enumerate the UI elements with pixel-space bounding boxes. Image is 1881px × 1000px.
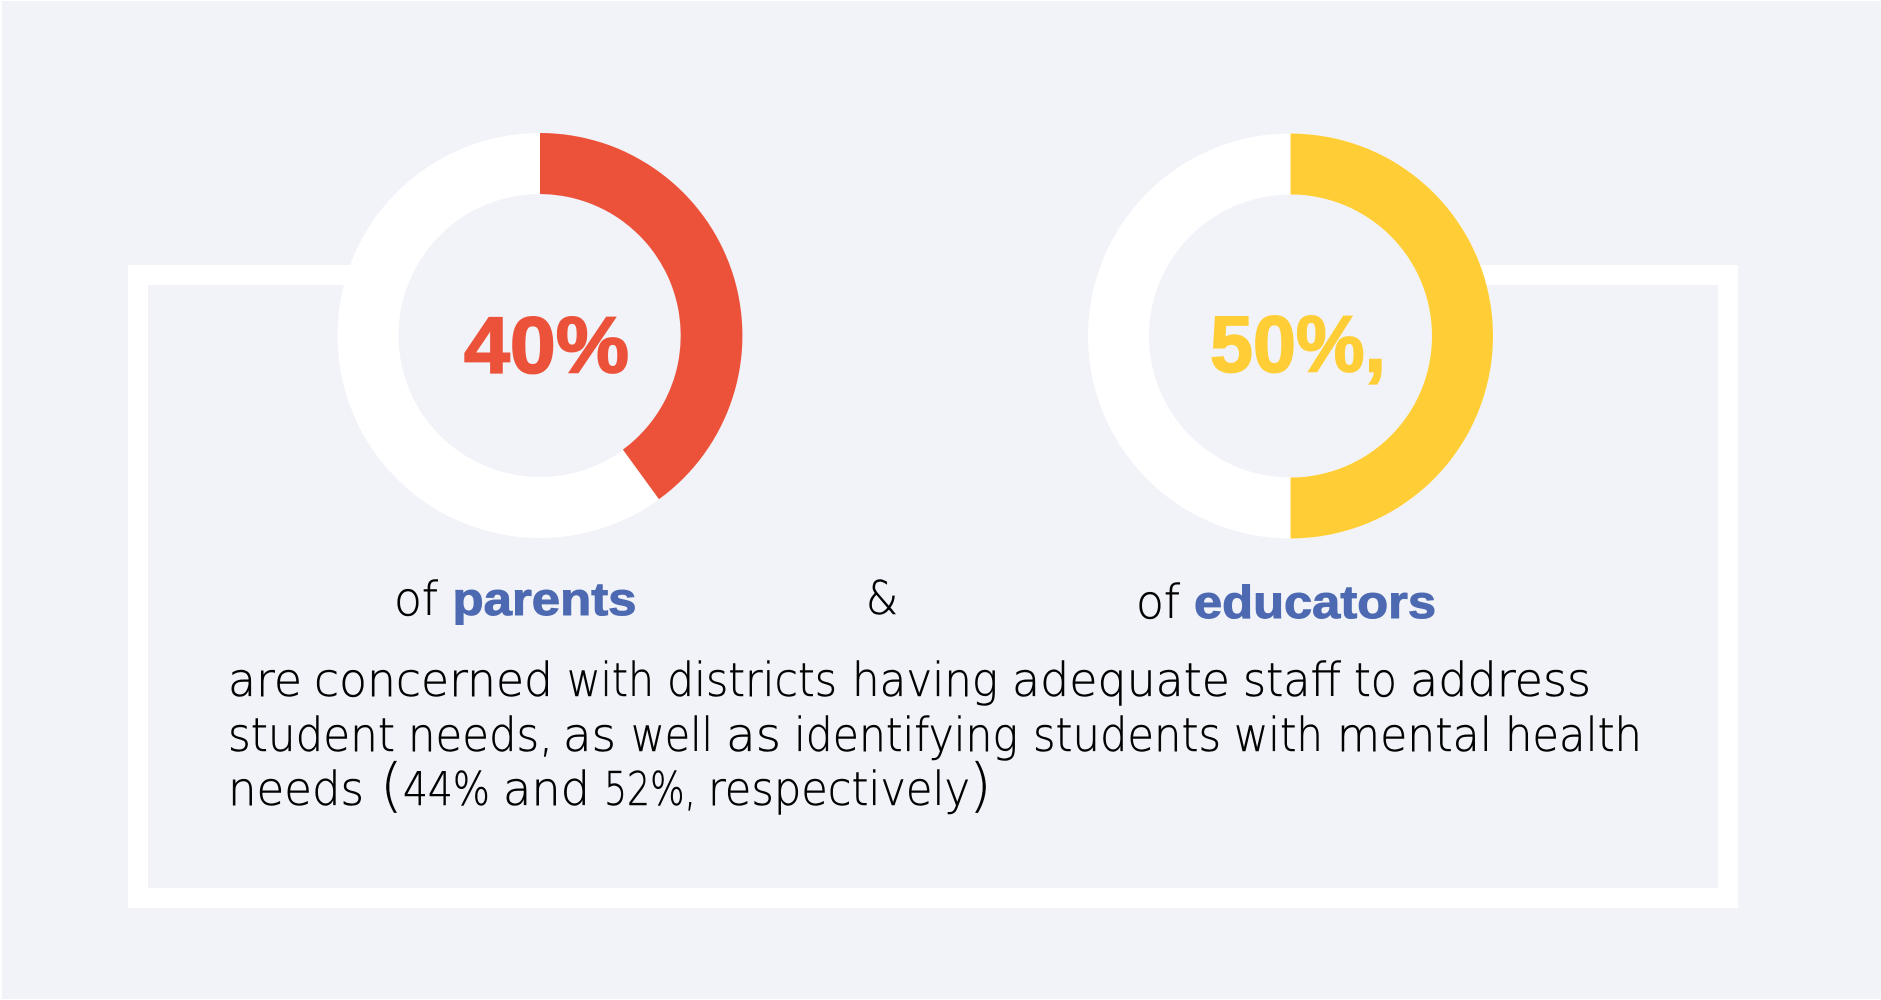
percentage: 40%: 40% [464,300,629,390]
description text: 52%, [604,762,696,816]
description text: needs, [408,708,553,762]
description text: students [1033,708,1221,762]
label: of educators: of [1136,575,1181,629]
description text: to [1354,653,1397,707]
description text: adequate [1012,653,1230,707]
description text: ( [380,751,403,819]
description text: student [228,708,395,762]
label: of parents: parents [452,573,636,625]
description text: are [228,653,302,707]
description text [228,653,1642,819]
ampersand: & [866,571,898,625]
description text: districts [667,653,837,707]
description text: as [726,708,781,762]
description text: 44% [403,762,490,816]
description text: ) [969,751,992,819]
description text: concerned [314,653,553,707]
label: of parents: of [394,572,439,626]
description text: needs [228,762,364,816]
description text: staff [1243,653,1341,707]
description text: well [631,708,713,762]
donut chart: educators 50% [1118,134,1493,538]
label: of educators: educators [1194,576,1436,628]
description text: health [1505,708,1642,762]
label: of parents [394,572,636,626]
description text: having [852,653,998,707]
frame [138,275,1728,898]
description text: as [563,708,616,762]
donut chart: parents 40% [368,133,742,508]
description text: with [1234,708,1323,762]
description text: address [1410,653,1591,707]
description text: and [503,762,590,816]
description text: mental [1337,708,1492,762]
description text: identifying [794,708,1018,762]
description text: with [567,653,654,707]
description text: respectively [708,762,970,816]
percentage: 50%,: 50%, [1210,300,1386,388]
